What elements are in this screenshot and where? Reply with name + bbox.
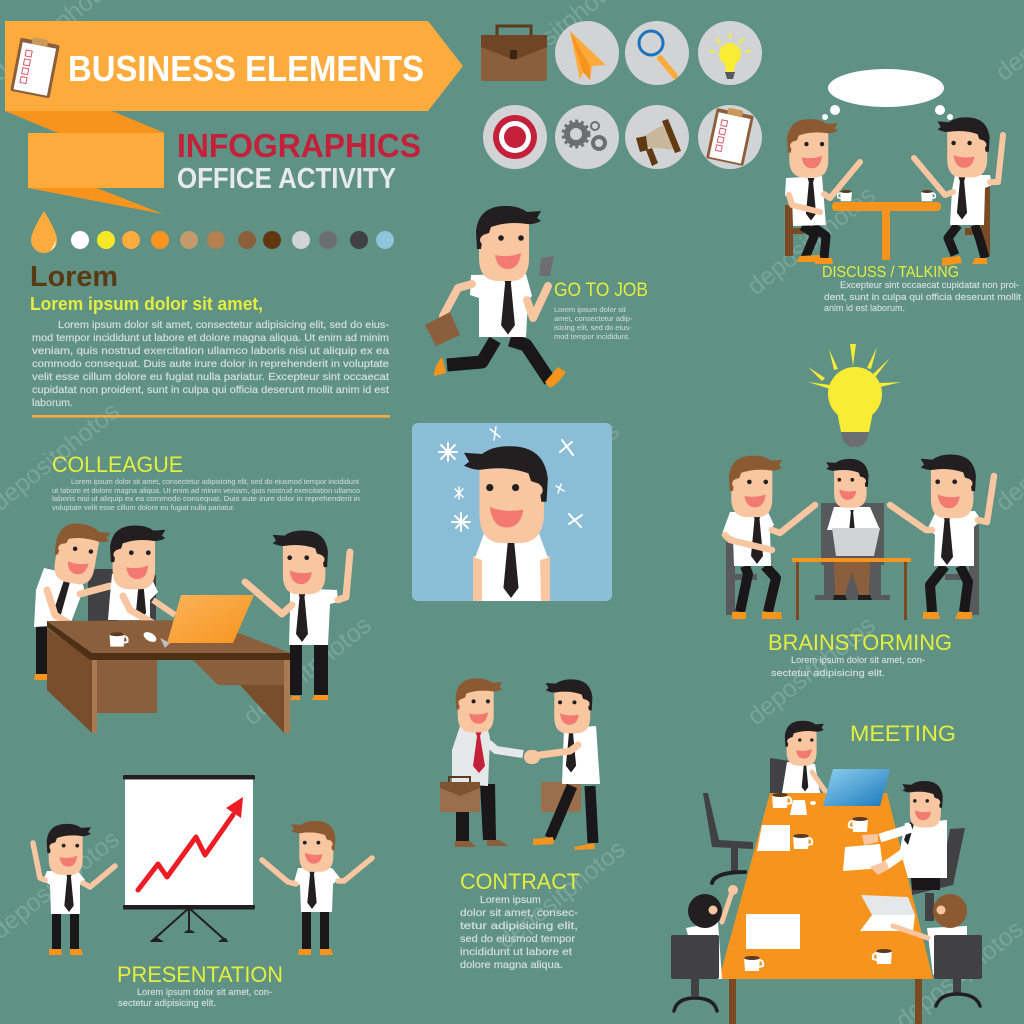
centre man	[826, 459, 880, 600]
scene: colleague	[34, 520, 350, 733]
intro text block: Lorem ipsum dolor sit amet, consectetur adipisicing elit, sed do eius-	[58, 319, 390, 331]
table	[832, 202, 941, 260]
man two	[108, 526, 175, 630]
label: go to job: GO TO JOB	[554, 280, 648, 301]
briefcase	[440, 777, 480, 812]
intro text block	[30, 261, 390, 418]
label: presentation	[117, 962, 283, 1008]
thought bubble	[822, 69, 953, 120]
papers and cups	[744, 793, 892, 971]
subtitle	[177, 127, 421, 195]
intro text block: commodo consequat. Duis aute irure dolor in reprehenderit in voluptate	[32, 358, 389, 370]
chairs	[726, 525, 979, 615]
label: contract: dolor sit amet, consec-	[460, 907, 579, 919]
label: brainstorming: BRAINSTORMING	[768, 630, 952, 655]
label: discuss / talking	[822, 264, 1022, 313]
title: BUSINESS ELEMENTS	[68, 48, 424, 89]
label: presentation: Lorem ipsum dolor sit amet, con-	[137, 987, 272, 997]
label: colleague: Lorem ipsum dolor sit amet, consectetur adipisicing elit, sed do eiusmod tempor incididunt	[71, 477, 360, 486]
title banner	[5, 21, 463, 214]
label: colleague	[52, 452, 360, 512]
top man and chair	[770, 721, 828, 795]
bottom left man	[671, 885, 738, 1011]
label: colleague: laboris nisi ut aliquip ex ea commodo consequat. Duis aute irure dolor in reprehenderit in	[52, 494, 360, 503]
right man	[890, 455, 994, 619]
right chair	[912, 828, 965, 921]
man three	[245, 531, 350, 700]
watermarks: depositphotos	[492, 835, 631, 955]
watermarks: depositphotos	[742, 611, 881, 731]
left man	[722, 456, 815, 619]
intro text block: mod tempor incididunt ut labore et dolore magna aliqua. Ut enim ad minim	[32, 332, 389, 344]
icon: light bulb	[698, 21, 762, 85]
table	[792, 558, 911, 620]
intro text block: Lorem	[30, 261, 118, 293]
man one	[34, 520, 111, 680]
left man	[785, 119, 860, 264]
tablet	[860, 895, 915, 931]
intro text block: laborum.	[32, 397, 73, 409]
label: go to job: amet, consectetur adip-	[554, 314, 633, 323]
bottom right man	[893, 894, 982, 1006]
label: colleague: ut labore et dolore magna aliqua. Ut enim ad minim veniam, quis nostrud exercitation ullamco	[52, 486, 360, 495]
office chair	[88, 569, 118, 621]
chairs	[785, 205, 804, 256]
label: contract	[460, 869, 580, 971]
label: brainstorming	[768, 630, 952, 678]
icon: megaphone	[625, 105, 689, 169]
label: go to job: isicing elit, sed do eius-	[554, 323, 632, 332]
laptop	[823, 769, 890, 806]
label: meeting: MEETING	[850, 721, 956, 746]
table	[719, 793, 933, 1024]
watermarks: depositphotos	[742, 181, 881, 301]
label: discuss / talking: DISCUSS / TALKING	[822, 264, 959, 281]
scene: discuss / talking	[785, 69, 1003, 266]
label: contract: incididunt ut labore et	[460, 946, 572, 958]
desk	[47, 620, 290, 733]
blue portrait panel	[412, 423, 612, 601]
label: contract: dolore magna aliqua.	[460, 959, 563, 971]
right man	[914, 117, 1003, 266]
running legs	[447, 340, 550, 381]
scene: go to job	[425, 206, 566, 388]
laptop	[160, 638, 170, 648]
label: brainstorming: Lorem ipsum dolor sit amet, con-	[791, 655, 925, 665]
right man	[862, 781, 947, 890]
sparkles	[439, 427, 582, 531]
scene: brainstorming	[722, 455, 994, 620]
scene: meeting	[671, 721, 982, 1024]
briefcase	[425, 312, 460, 346]
scene: contract	[440, 678, 600, 850]
intro text block: Lorem ipsum dolor sit amet,	[30, 294, 263, 314]
intro text block: veniam, quis nostrud exercitation ullamco laboris nisi ut aliquip ex ea	[32, 345, 389, 357]
label: contract: sed do eiusmod tempor	[460, 933, 576, 945]
subtitle: OFFICE ACTIVITY	[177, 163, 396, 195]
icon: paper plane	[555, 21, 619, 85]
label: colleague: COLLEAGUE	[52, 452, 183, 477]
label: contract: tetur adipisicing elit,	[460, 920, 578, 932]
icon: clipboard	[10, 35, 60, 98]
colour palette	[31, 211, 394, 253]
label: presentation: PRESENTATION	[117, 962, 283, 987]
label: brainstorming: sectetur adipisicing elit.	[771, 668, 885, 678]
label: presentation: sectetur adipisicing elit.	[118, 998, 216, 1008]
icon: big light bulb	[808, 344, 901, 447]
left man	[440, 678, 538, 847]
label: contract: CONTRACT	[460, 869, 580, 894]
intro text block: cupidatat non proident, sunt in culpa qui officia deserunt mollit anim id est	[32, 384, 389, 396]
icon: magnifier	[625, 21, 689, 85]
label: go to job: mod tempor incididunt.	[554, 332, 630, 341]
intro text block: velit esse cillum dolore eu fugiat nulla pariatur. Excepteur sint occaecat	[32, 371, 389, 383]
label: discuss / talking: Excepteur sint occaecat cupidatat non proi-	[840, 280, 1019, 290]
icon: target	[483, 105, 547, 169]
label: discuss / talking: dent, sunt in culpa qui officia deserunt mollit	[824, 292, 1022, 302]
phone	[539, 256, 554, 276]
scene: presentation	[33, 775, 372, 955]
label: go to job	[554, 280, 648, 341]
icon: gears	[555, 105, 619, 169]
watermarks: depositphotos	[486, 417, 625, 537]
right man	[526, 679, 600, 850]
label: go to job: Lorem ipsum dolor sit	[554, 305, 627, 314]
empty left chair	[703, 793, 753, 883]
icon: clipboard	[698, 105, 762, 169]
label: colleague: voluptate velit esse cillum dolore eu fugiat nulla pariatur.	[52, 503, 235, 512]
subtitle: INFOGRAPHICS	[177, 127, 421, 164]
icon: briefcase	[481, 26, 547, 81]
shirt	[470, 274, 532, 337]
right man	[262, 821, 372, 955]
label: discuss / talking: anim id est laborum.	[824, 303, 905, 313]
watermarks: depositphotos	[238, 611, 377, 731]
label: contract: Lorem ipsum	[480, 894, 541, 906]
flip chart	[123, 775, 255, 942]
left man	[33, 824, 115, 955]
mouse	[142, 630, 158, 644]
